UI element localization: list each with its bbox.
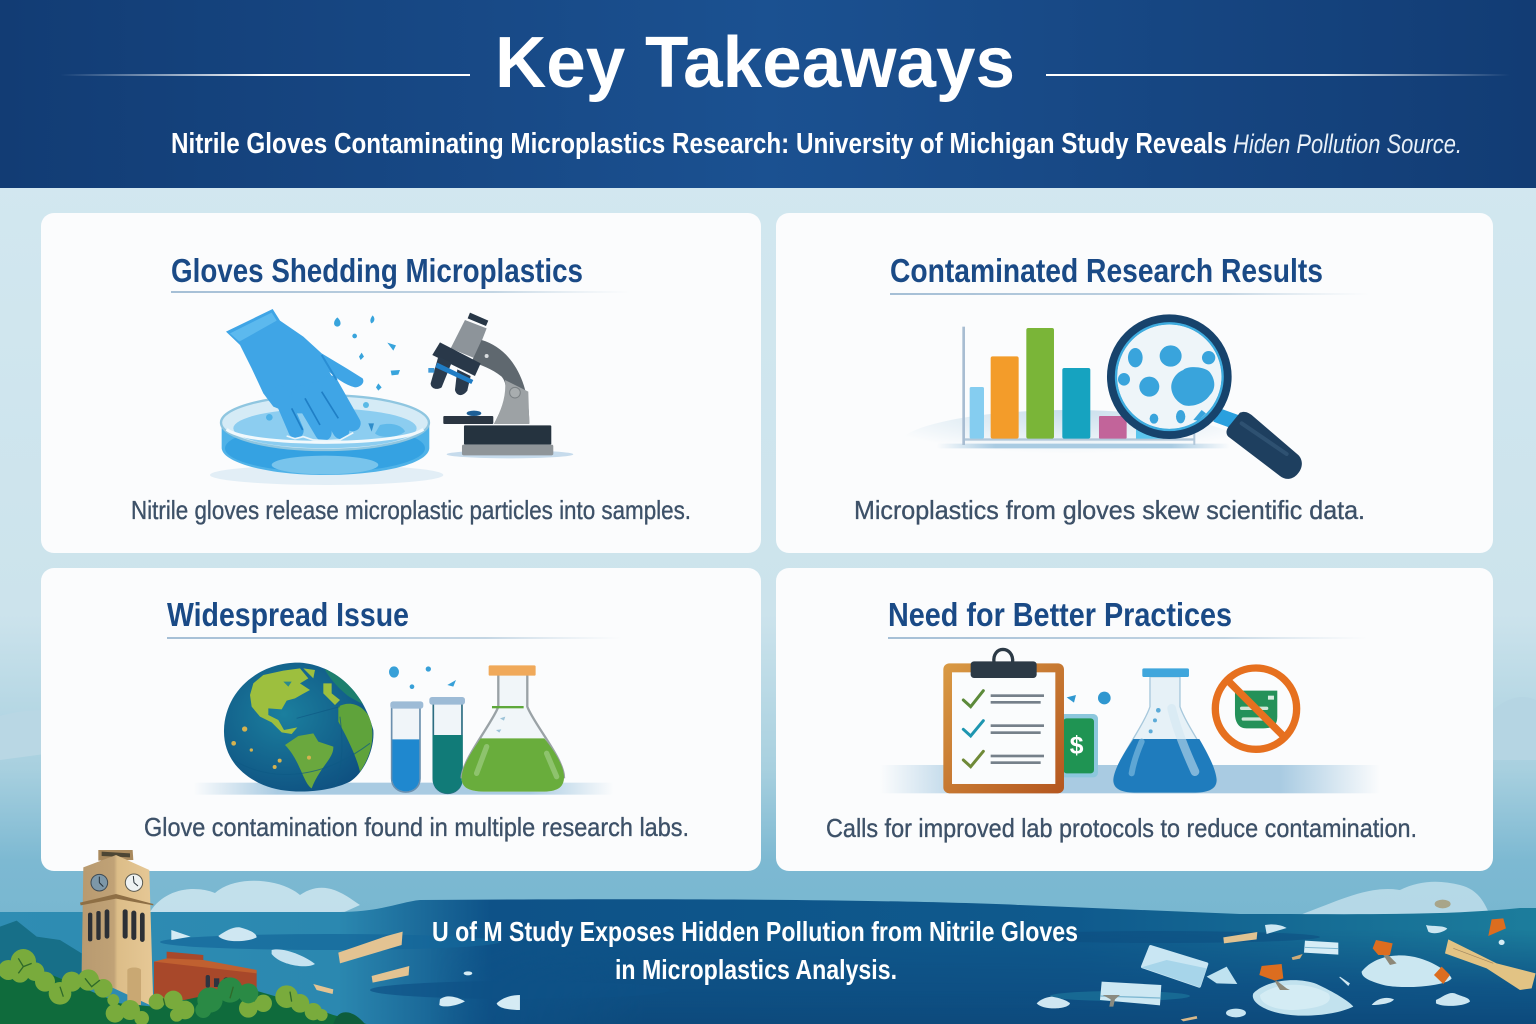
card: Gloves Shedding Microplastics xyxy=(41,213,761,553)
card: Widespread Issue xyxy=(41,568,761,871)
debris left xyxy=(171,927,520,1010)
icon: bar chart and magnifying glass xyxy=(897,319,1302,483)
title: Key Takeaways xyxy=(495,23,1015,103)
heading: Need for Better Practices xyxy=(888,596,1232,633)
caption: Calls for improved lab protocols to reduce contamination. xyxy=(826,813,1417,843)
trees xyxy=(0,949,367,1024)
icon: glove, petri dish and microscope xyxy=(210,309,573,485)
bottom left: tower, building and trees xyxy=(0,850,520,1024)
card: Contaminated Research Results xyxy=(776,213,1493,553)
caption: Nitrile gloves release microplastic particles into samples. xyxy=(131,495,691,525)
microscope xyxy=(428,313,553,455)
footer statement: in Microplastics Analysis. xyxy=(615,954,897,985)
icon: checklist, money, flask, prohibition sign xyxy=(880,649,1380,793)
icon: checklist, money, flask, prohibition sign: $ xyxy=(1070,732,1084,759)
card: Need for Better Practices xyxy=(776,568,1493,871)
glove xyxy=(226,309,363,441)
subtitle: Nitrile Gloves Contaminating Microplastics Research: University of Michigan Study Reveals xyxy=(171,128,1227,160)
header banner xyxy=(0,0,1536,188)
heading: Widespread Issue xyxy=(167,596,409,633)
background mountains xyxy=(0,697,1536,760)
caption: Glove contamination found in multiple research labs. xyxy=(144,812,689,842)
heading: Gloves Shedding Microplastics xyxy=(171,252,583,289)
caption: Microplastics from gloves skew scientific data. xyxy=(854,495,1365,525)
bottom right debris xyxy=(1037,900,1536,1021)
heading: Contaminated Research Results xyxy=(890,252,1323,289)
icon: globe, test tubes and flask xyxy=(193,663,613,795)
subtitle: Hiden Pollution Source. xyxy=(1233,129,1462,159)
bottom scene: polluted water xyxy=(0,881,1536,1024)
footer statement xyxy=(432,916,1078,985)
footer statement: U of M Study Exposes Hidden Pollution from Nitrile Gloves xyxy=(432,916,1078,947)
